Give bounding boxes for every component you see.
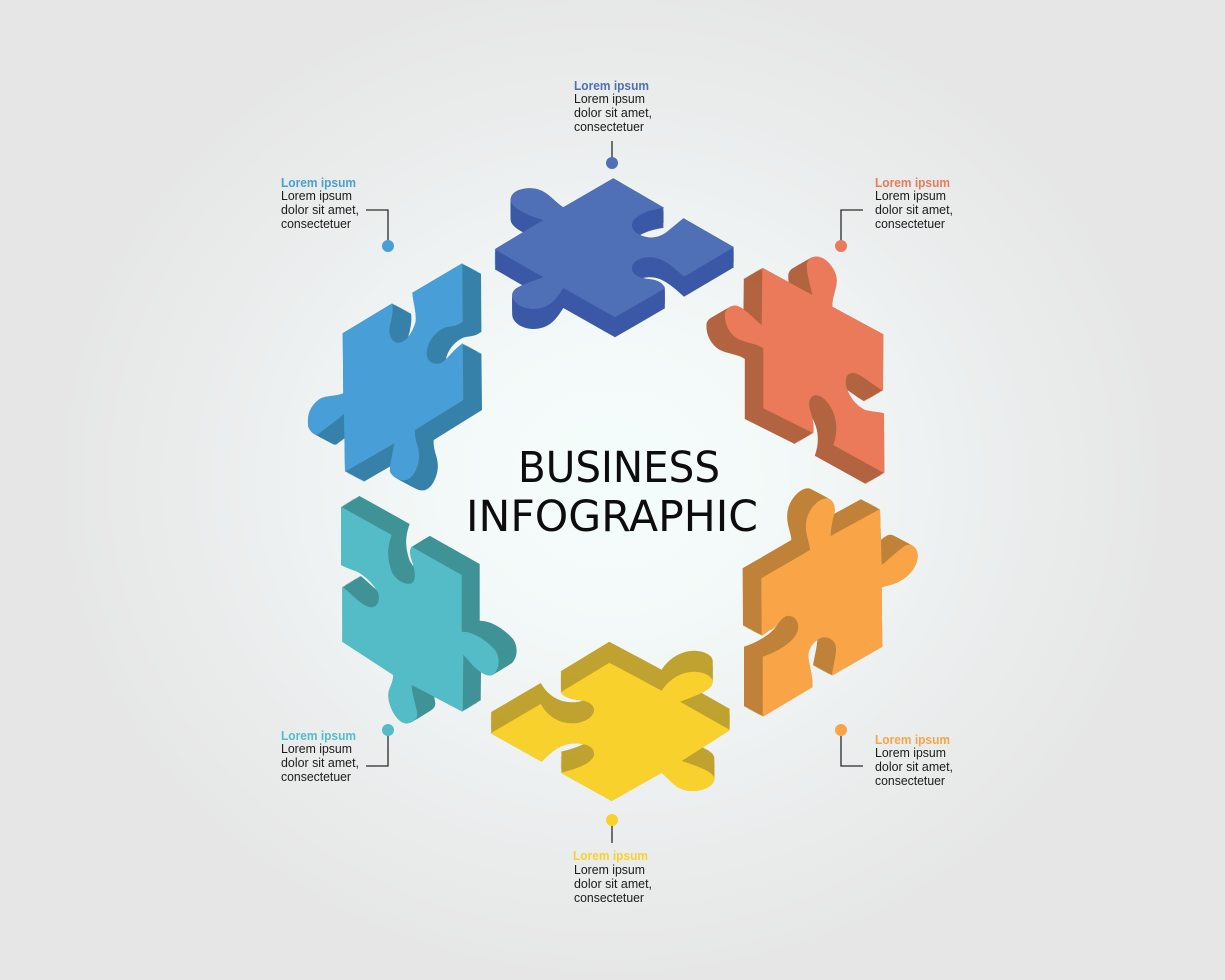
callout: bottom (yellow) xyxy=(573,814,652,905)
puzzle piece: yellow (bottom) xyxy=(491,642,730,801)
callout: lower left (teal): dolor sit amet, xyxy=(281,756,359,770)
callout: lower right (orange): Lorem ipsum xyxy=(875,733,950,747)
title xyxy=(466,444,758,542)
puzzle piece: orange (lower right) xyxy=(743,488,918,717)
callout: top (blue): Lorem ipsum xyxy=(574,79,649,93)
callout: upper left (sky blue): consectetuer xyxy=(281,217,351,231)
callout: lower right (orange): Lorem ipsum xyxy=(875,746,946,760)
callout: upper left (sky blue): dolor sit amet, xyxy=(281,203,359,217)
callout: lower left (teal): consectetuer xyxy=(281,770,351,784)
callout: upper right (coral): consectetuer xyxy=(875,217,945,231)
callout: bottom (yellow): consectetuer xyxy=(574,891,644,905)
callout: upper right (coral) xyxy=(835,176,953,252)
callout: upper left (sky blue): Lorem ipsum xyxy=(281,189,352,203)
puzzle piece: teal (lower left) xyxy=(341,496,517,723)
callout: lower right (orange): consectetuer xyxy=(875,774,945,788)
callout: lower left (teal) xyxy=(281,724,394,784)
callout: lower right (orange): dolor sit amet, xyxy=(875,760,953,774)
title: BUSINESS xyxy=(518,444,720,493)
title: INFOGRAPHIC xyxy=(466,493,758,542)
callout: lower left (teal): Lorem ipsum xyxy=(281,729,356,743)
callout: top (blue): Lorem ipsum xyxy=(574,92,645,106)
callout: top (blue): dolor sit amet, xyxy=(574,106,652,120)
puzzle piece: coral (upper right) xyxy=(706,257,884,484)
callout: lower right (orange) xyxy=(835,724,953,788)
callout: top (blue): consectetuer xyxy=(574,120,644,134)
callout: upper right (coral): Lorem ipsum xyxy=(875,189,946,203)
callout: lower left (teal): Lorem ipsum xyxy=(281,742,352,756)
callout: top (blue) xyxy=(574,79,652,169)
callout: bottom (yellow): dolor sit amet, xyxy=(574,877,652,891)
callout: upper left (sky blue): Lorem ipsum xyxy=(281,176,356,190)
callout: upper right (coral): dolor sit amet, xyxy=(875,203,953,217)
callout: bottom (yellow): Lorem ipsum xyxy=(574,863,645,877)
puzzle piece: blue (top) xyxy=(495,178,734,337)
callout: upper right (coral): Lorem ipsum xyxy=(875,176,950,190)
callout: bottom (yellow): Lorem ipsum xyxy=(573,849,648,863)
callout: upper left (sky blue) xyxy=(281,176,394,252)
puzzle piece: sky blue (upper left) xyxy=(308,263,482,490)
